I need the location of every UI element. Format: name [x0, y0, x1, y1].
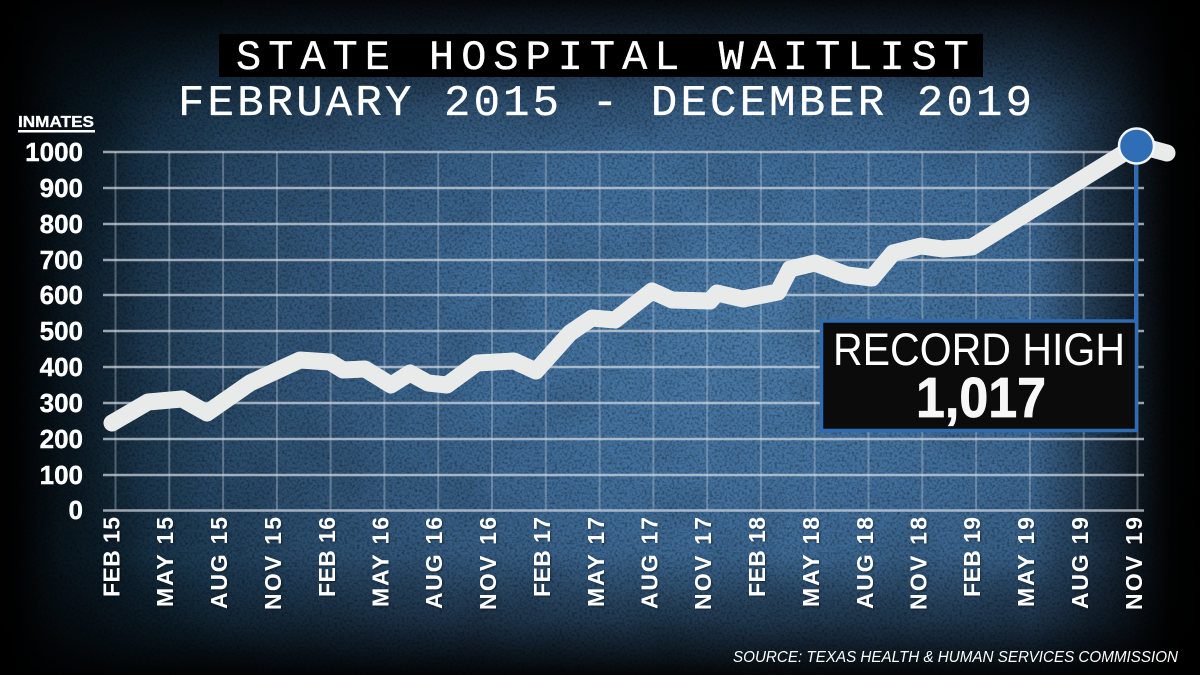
x-axis labels: FEB 17 [529, 517, 555, 597]
waitlist trend line [112, 145, 1167, 423]
x-axis labels: AUG 16 [421, 517, 447, 609]
x-axis labels: MAY 19 [1013, 517, 1039, 607]
peak marker [1119, 128, 1154, 164]
y-axis labels: 100 [40, 460, 83, 490]
y-axis labels: 200 [40, 424, 83, 454]
y-axis labels: 900 [40, 173, 83, 203]
x-axis labels: NOV 17 [690, 517, 716, 610]
y-axis labels: 1000 [25, 137, 83, 167]
x-axis labels: FEB 18 [744, 517, 770, 597]
x-axis labels: MAY 16 [368, 517, 394, 607]
y-axis labels: 300 [40, 388, 83, 418]
y-axis labels [25, 137, 83, 525]
y-axis labels: 800 [40, 209, 83, 239]
y-axis labels: 500 [40, 316, 83, 346]
y-axis title: INMATES [18, 114, 94, 131]
x-axis labels: AUG 19 [1067, 517, 1093, 609]
subtitle: FEBRUARY 2015 - DECEMBER 2019 [178, 79, 1032, 129]
x-axis labels: AUG 18 [852, 517, 878, 609]
x-axis labels: FEB 16 [314, 517, 340, 597]
x-axis labels: NOV 19 [1121, 517, 1147, 610]
record high callout: RECORD HIGH [833, 324, 1125, 375]
y-axis labels: 0 [69, 495, 83, 525]
x-axis labels: NOV 15 [260, 517, 286, 610]
x-axis labels: AUG 15 [206, 517, 232, 609]
x-axis labels: MAY 18 [798, 517, 824, 607]
x-axis labels: FEB 19 [959, 517, 985, 597]
source note: SOURCE: TEXAS HEALTH & HUMAN SERVICES COMMISSION [733, 649, 1179, 666]
title banner: STATE HOSPITAL WAITLIST [236, 34, 969, 82]
y-axis labels: 700 [40, 245, 83, 275]
x-axis labels: AUG 17 [636, 517, 662, 609]
x-axis labels: FEB 15 [98, 517, 124, 597]
record high callout: 1,017 [916, 366, 1046, 430]
y-axis labels: 400 [40, 352, 83, 382]
x-axis labels: MAY 15 [152, 517, 178, 607]
x-axis labels: NOV 16 [475, 517, 501, 610]
x-axis labels [98, 517, 1147, 610]
record high callout [822, 321, 1136, 430]
y-axis labels: 600 [40, 280, 83, 310]
x-axis labels: MAY 17 [583, 517, 609, 607]
callout leader line [1134, 150, 1138, 325]
chart grid [103, 152, 1144, 510]
x-axis labels: NOV 18 [906, 517, 932, 610]
